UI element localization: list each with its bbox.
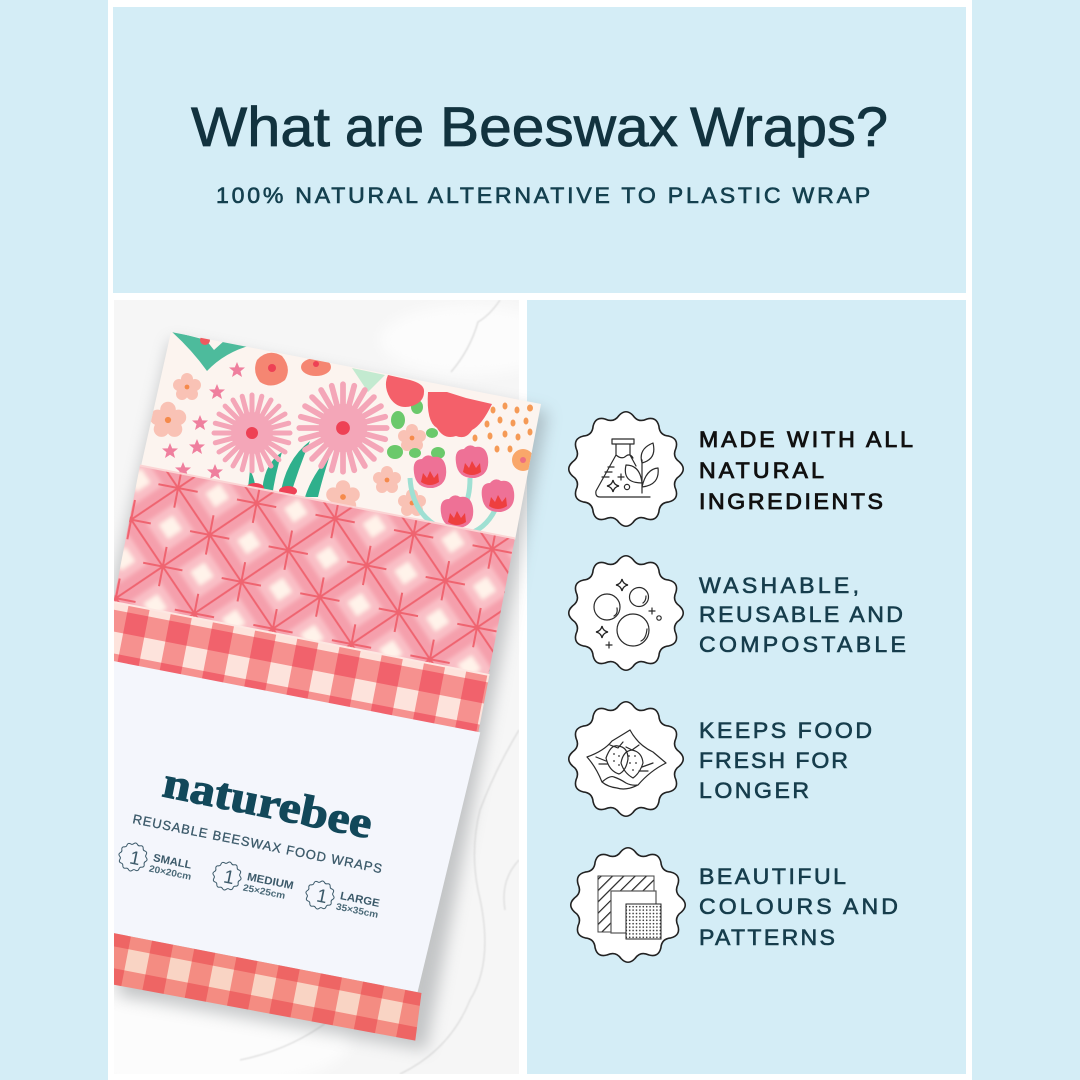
size: small: 1 xyxy=(128,848,142,870)
icon: strawberries in wrap xyxy=(569,702,683,816)
title xyxy=(191,95,888,158)
title: Wraps? xyxy=(690,95,888,158)
daisies xyxy=(214,395,290,471)
title: Beeswax xyxy=(440,95,678,158)
green leaf xyxy=(172,332,246,371)
panel: product photo xyxy=(114,300,553,1074)
subtitle: 100% NATURAL ALTERNATIVE TO PLASTIC WRAP xyxy=(216,183,870,208)
infographic canvas xyxy=(108,0,972,1080)
text: natural ingredients: NATURAL xyxy=(699,458,824,483)
upper gingham wrap xyxy=(114,603,490,732)
paper shadow xyxy=(100,340,548,1050)
green blobs xyxy=(387,400,445,459)
text: keeps food fresh xyxy=(699,718,872,803)
wrap stack xyxy=(114,332,553,1056)
tulips xyxy=(414,455,446,488)
text: natural ingredients: INGREDIENTS xyxy=(699,489,883,514)
orange dots xyxy=(472,402,534,471)
panel: benefits xyxy=(527,300,966,1074)
lattice wrap xyxy=(112,466,515,681)
text: washable: WASHABLE, xyxy=(699,573,859,598)
size: small: SMALL xyxy=(152,852,193,872)
icon: flask and leaves xyxy=(569,412,683,526)
size: small: 20×20cm xyxy=(148,864,192,883)
size: medium xyxy=(212,862,294,899)
text: keeps food fresh: LONGER xyxy=(699,778,809,803)
text: colours and patterns: BEAUTIFUL xyxy=(699,864,846,889)
marble surface xyxy=(114,300,519,1074)
product description: REUSABLE BEESWAX FOOD WRAPS xyxy=(131,811,384,876)
coral blobs xyxy=(255,353,288,386)
grass xyxy=(247,441,330,497)
icon: layered wraps xyxy=(571,848,685,962)
text: colours and patterns xyxy=(699,864,898,950)
peach flowers and stars xyxy=(173,373,201,400)
size: medium: 1 xyxy=(222,867,236,889)
title: are xyxy=(345,95,424,158)
text: colours and patterns: PATTERNS xyxy=(699,925,835,950)
lower gingham wrap xyxy=(114,933,422,1041)
size: medium: 25×25cm xyxy=(242,883,286,902)
teal stems xyxy=(410,478,495,535)
size: large: LARGE xyxy=(339,890,381,910)
size: large: 1 xyxy=(315,886,329,908)
size: large: 35×35cm xyxy=(335,902,379,921)
text: washable: COMPOSTABLE xyxy=(699,632,906,657)
size: small xyxy=(118,842,191,880)
text: keeps food fresh: FRESH FOR xyxy=(699,748,848,773)
icon: bubbles xyxy=(569,556,683,670)
folded wrap stack xyxy=(114,464,515,1041)
text: washable: REUSABLE AND xyxy=(699,602,903,627)
red flowers xyxy=(386,375,424,407)
text: natural ingredients: MADE WITH ALL xyxy=(699,427,913,452)
text: natural ingredients xyxy=(699,427,913,514)
floral wrap pattern xyxy=(142,332,541,540)
title: What xyxy=(191,95,330,158)
text: washable xyxy=(699,573,906,657)
size: large xyxy=(305,880,380,918)
white paper band xyxy=(114,661,480,992)
text: colours and patterns: COLOURS AND xyxy=(699,894,898,919)
size: medium: MEDIUM xyxy=(246,871,294,892)
panel: benefits background xyxy=(527,300,966,1074)
text: keeps food fresh: KEEPS FOOD xyxy=(699,718,872,743)
panel: header xyxy=(113,7,966,293)
brand name: naturebee xyxy=(159,758,377,848)
